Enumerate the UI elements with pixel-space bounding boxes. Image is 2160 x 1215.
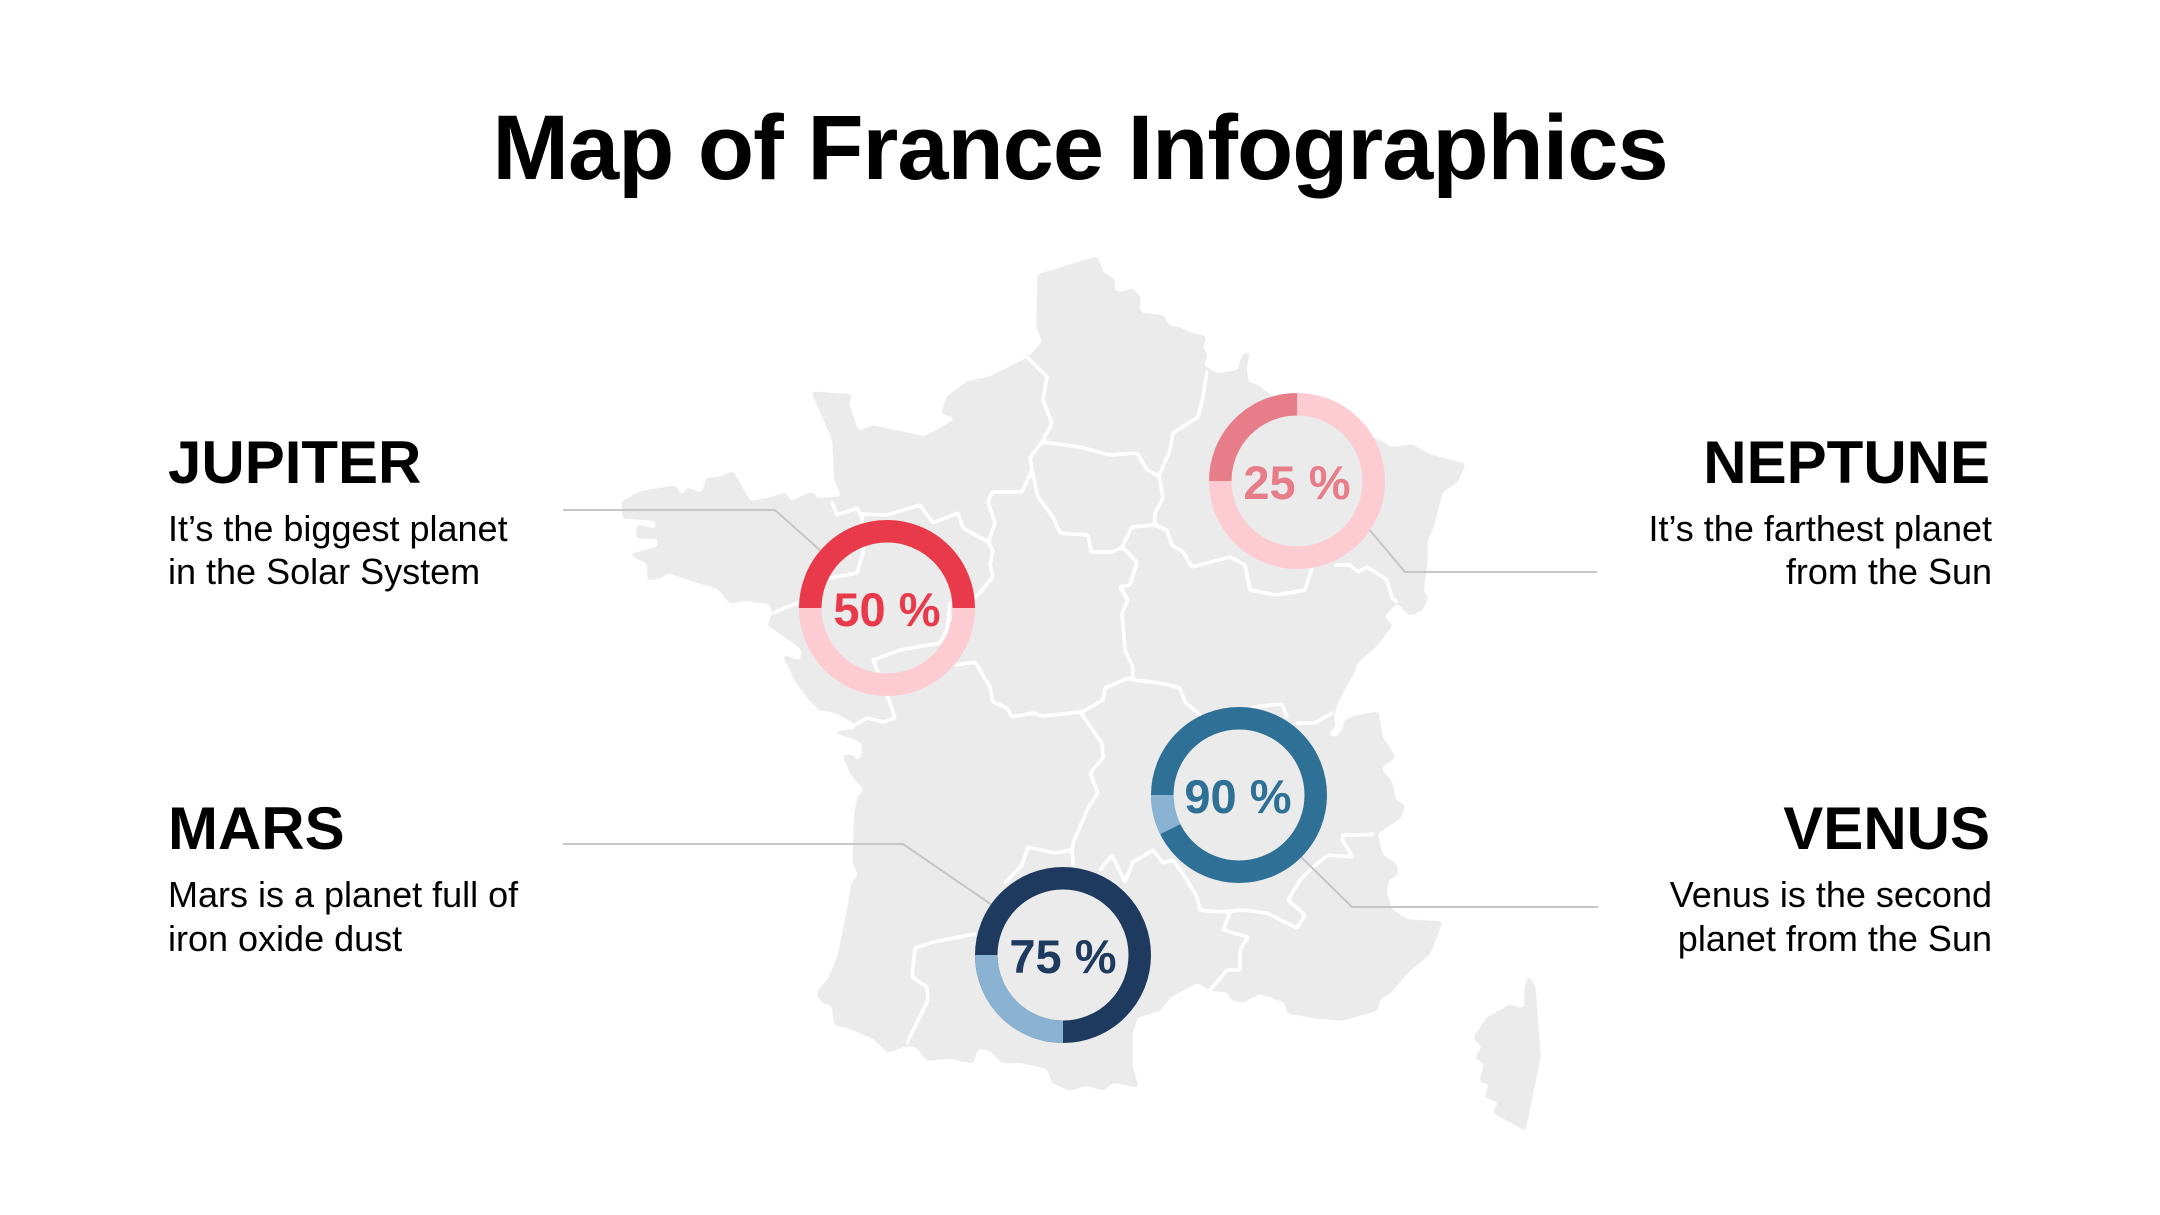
connector line: Jupiter <box>563 510 822 552</box>
connector line: Neptune <box>1368 528 1597 572</box>
map: mainland <box>622 257 1465 1090</box>
map: region borders <box>773 358 1397 1043</box>
text block: Mars: Mars is a planet full of <box>168 874 519 915</box>
text block: Jupiter: It’s the biggest planet <box>168 508 508 549</box>
title: Map of France Infographics <box>492 97 1668 199</box>
text block: Venus: planet from the Sun <box>1678 918 1992 959</box>
text block: Jupiter <box>168 429 508 592</box>
text block: Venus: VENUS <box>1783 795 1990 862</box>
donut: 90 percent: 90 % <box>1184 770 1292 823</box>
map of France <box>622 257 1540 1130</box>
text block: Mars <box>168 795 519 959</box>
donut: 50 percent: 50 % <box>833 583 941 636</box>
donut: 90 percent <box>1162 718 1316 872</box>
text block: Jupiter: in the Solar System <box>168 551 480 592</box>
connector line: Mars <box>563 844 992 905</box>
text block: Venus: Venus is the second <box>1670 874 1992 915</box>
text block: Mars: MARS <box>168 795 345 862</box>
connector line: Venus <box>1300 856 1598 907</box>
donut: 50 percent <box>810 531 964 685</box>
text block: Neptune: It’s the farthest planet <box>1648 508 1992 549</box>
donut: 25 percent: 25 % <box>1243 456 1351 509</box>
donut: 25 percent <box>1220 404 1374 558</box>
text block: Neptune <box>1648 429 1992 592</box>
text block: Neptune: from the Sun <box>1786 551 1992 592</box>
map: Corsica <box>1474 976 1540 1130</box>
text block: Venus <box>1670 795 1992 959</box>
text block: Neptune: NEPTUNE <box>1703 429 1990 496</box>
donut: 75 percent: 75 % <box>1009 930 1117 983</box>
text block: Mars: iron oxide dust <box>168 918 402 959</box>
donut: 75 percent <box>986 878 1140 1032</box>
text block: Jupiter: JUPITER <box>168 429 421 496</box>
